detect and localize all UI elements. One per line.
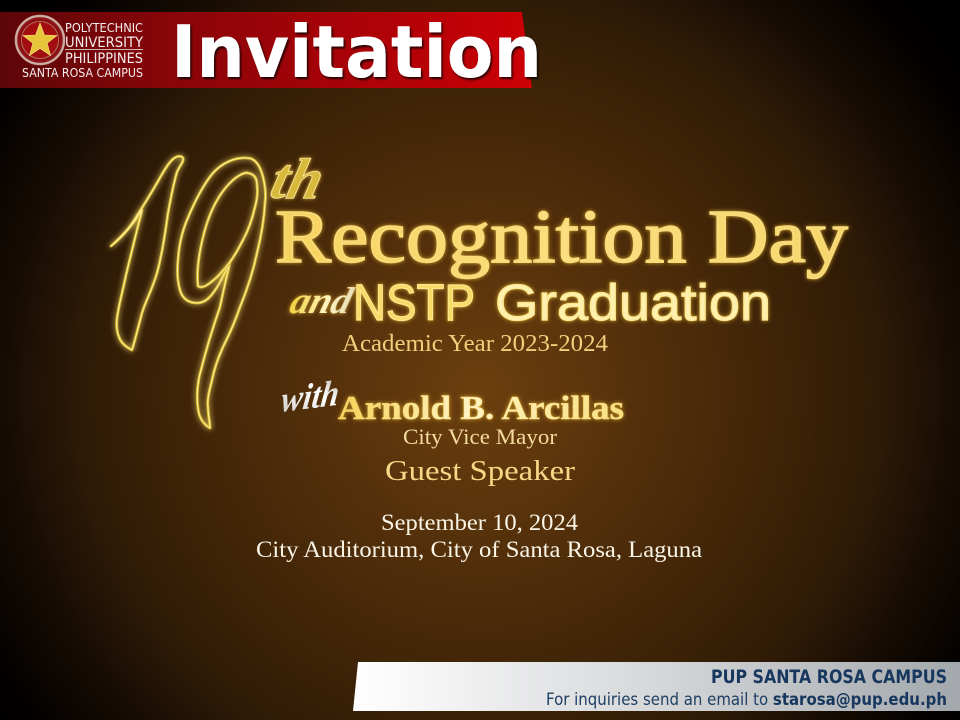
icon: university seal (16, 16, 64, 64)
word: NSTP: NSTP (353, 274, 475, 331)
event date: September 10, 2024 (381, 510, 579, 535)
guest speaker name: Arnold B. Arcillas (338, 390, 624, 427)
heading: Recognition Day: Recognition Day (275, 195, 848, 279)
banner title: Invitation (171, 10, 542, 94)
guest speaker label: Guest Speaker (385, 455, 575, 487)
university name: POLYTECHNIC (65, 21, 143, 35)
numeral 9 (177, 158, 265, 428)
script word: with: with (279, 372, 342, 420)
footer bar (353, 662, 960, 711)
header banner (0, 10, 542, 94)
footer shape (353, 662, 960, 711)
ordinal suffix th: th (265, 147, 331, 211)
script word: and: and (285, 280, 358, 322)
neon numeral 19 (111, 156, 265, 428)
contact line: For inquiries send an email to starosa@pup.edu.ph (546, 690, 947, 709)
event venue: City Auditorium, City of Santa Rosa, Laguna (256, 537, 702, 562)
university name (22, 21, 143, 80)
university name: SANTA ROSA CAMPUS (22, 66, 143, 80)
university name: PHILIPPINES (65, 51, 143, 67)
numeral 1 (111, 156, 183, 350)
banner shape (0, 12, 532, 88)
university name: UNIVERSITY (65, 35, 143, 51)
word: Graduation: Graduation (495, 274, 771, 331)
heading: NSTP Graduation (353, 274, 771, 331)
academic year: Academic Year 2023-2024 (342, 331, 608, 357)
speaker title: City Vice Mayor (403, 424, 558, 449)
